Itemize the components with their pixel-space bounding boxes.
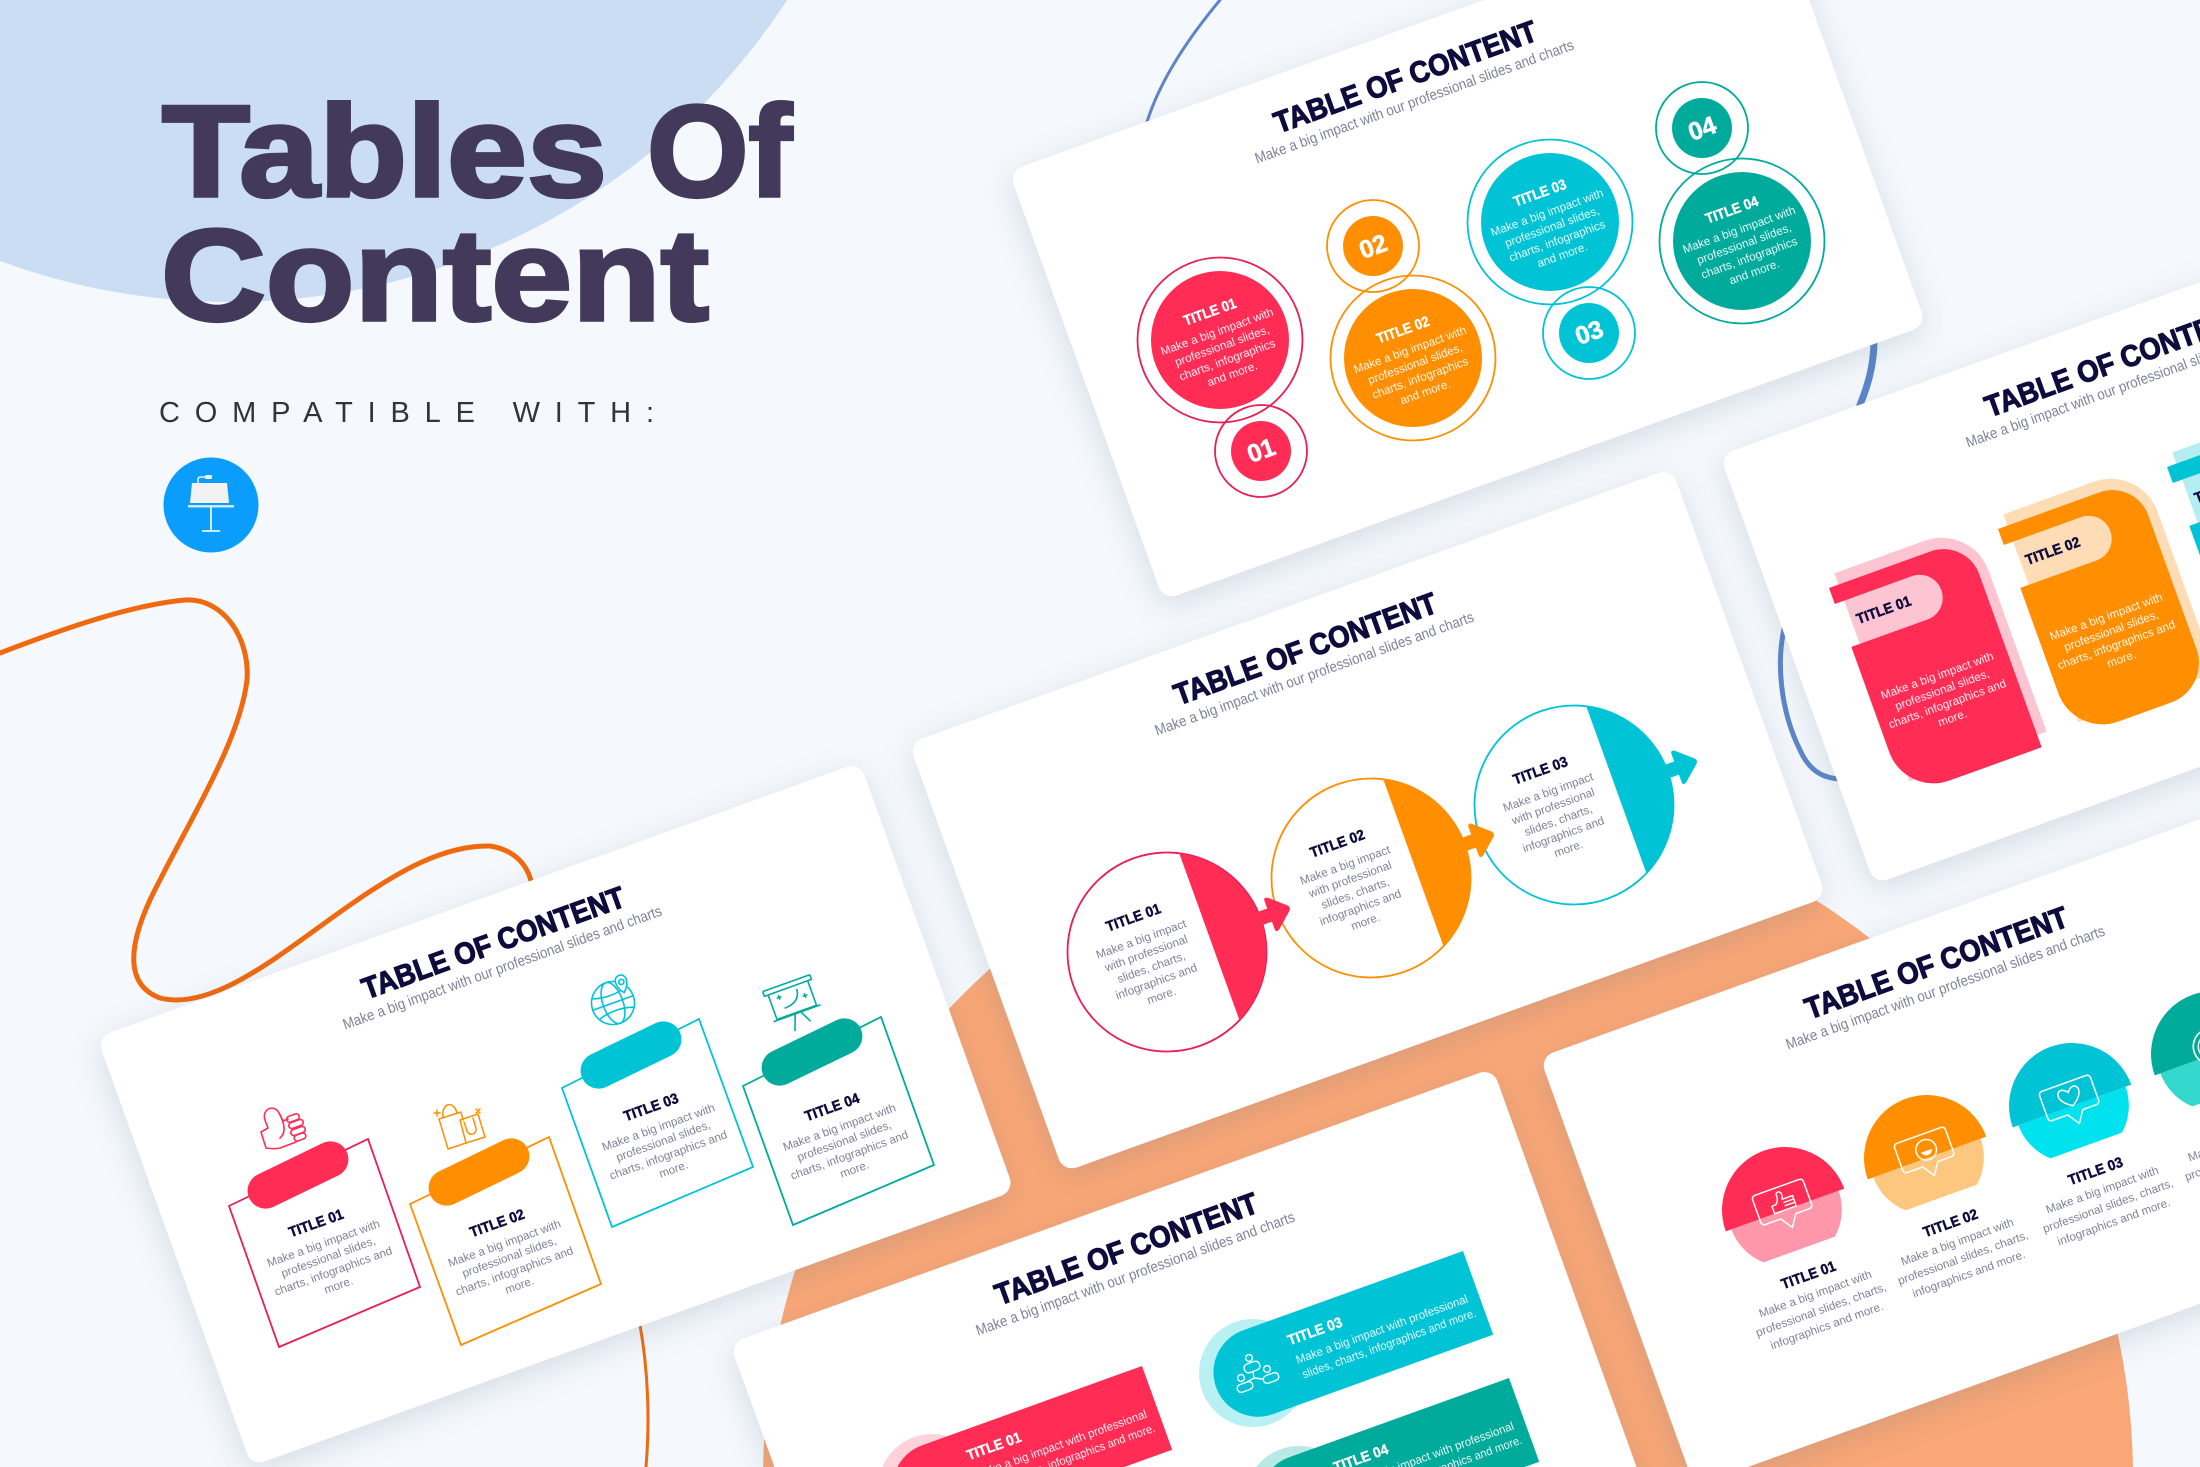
circle item 02: and more. xyxy=(1398,377,1452,407)
arrow circle 02: with professional xyxy=(1306,859,1393,901)
bar item 03: slides, charts, infographics and more. xyxy=(1300,1307,1478,1381)
note card 02 xyxy=(410,1132,601,1345)
slide card and heading A: Make a big impact with our professional slides and charts xyxy=(1253,37,1576,167)
icon item 03 xyxy=(1986,1023,2181,1252)
circle item 02: TITLE 02 xyxy=(1375,314,1432,348)
note card 04: Make a big impact with xyxy=(781,1101,898,1154)
icon item 02: professional slides, charts, xyxy=(1896,1229,2030,1288)
bar item 01 xyxy=(878,1366,1172,1467)
note card 02: TITLE 02 xyxy=(468,1207,527,1241)
circle item 02: 02 xyxy=(1356,229,1391,265)
folder card 01 xyxy=(1825,524,2051,797)
slide card and heading E xyxy=(1540,782,2200,1467)
circle item 01: 01 xyxy=(1244,433,1279,469)
folder card 02: more. xyxy=(2105,648,2138,671)
background light blue circle xyxy=(0,0,895,302)
icon item 01: TITLE 01 xyxy=(1779,1259,1838,1293)
circle item 03: professional slides, xyxy=(1503,204,1601,250)
circle item 02: charts, infographics xyxy=(1370,355,1470,402)
note card 04 xyxy=(743,1012,934,1225)
folder card 02: charts, infographics and xyxy=(2056,618,2177,672)
heading: Tables Of Content: Content xyxy=(161,202,709,348)
slide card and heading C: Make a big impact with our professional slides and charts xyxy=(341,903,664,1033)
note card 01: more. xyxy=(322,1274,355,1297)
note card 04: more. xyxy=(838,1158,871,1181)
slide card and heading F: TABLE OF CONTENT xyxy=(991,1187,1262,1312)
folder card 02: TITLE 02 xyxy=(2023,535,2082,569)
note card 01 xyxy=(229,1135,420,1347)
arrow circle 03: TITLE 03 xyxy=(1511,754,1570,789)
panel: slide with pill bars xyxy=(730,1068,1647,1467)
icon: people network xyxy=(1236,1355,1280,1393)
note card 03: Make a big impact with xyxy=(600,1101,717,1154)
panel: slide with outlined note cards xyxy=(97,762,1014,1466)
icon item 02: Make a big impact with xyxy=(1899,1216,2015,1268)
arrow circle 01: more. xyxy=(1145,985,1178,1007)
heading: Tables Of Content: Of xyxy=(647,78,793,224)
bar item 03 xyxy=(1199,1251,1493,1429)
note card 03 xyxy=(562,1015,753,1227)
folder card 02 xyxy=(1994,465,2200,738)
circle item 03 xyxy=(1468,140,1635,379)
panel: slide with half-circle icons xyxy=(1540,782,2200,1467)
icon item 03: Make a big impact with xyxy=(2044,1164,2160,1216)
folder card 01: more. xyxy=(1936,707,1969,730)
panel: slide with arrow circles xyxy=(909,468,1826,1172)
slide card and heading F: Make a big impact with our professional slides and charts xyxy=(974,1209,1297,1339)
panel: slide with folder cards xyxy=(1720,180,2200,884)
arrow circle 01: slides, charts, xyxy=(1116,949,1187,986)
heading: Tables Of Content xyxy=(161,78,793,348)
note card 04: charts, infographics and xyxy=(789,1128,910,1183)
note card 02: more. xyxy=(503,1274,536,1297)
note card 01: charts, infographics and xyxy=(273,1244,394,1299)
icon item 03: TITLE 03 xyxy=(2066,1155,2125,1189)
circle item 04 xyxy=(1656,82,1824,324)
circle item 01: TITLE 01 xyxy=(1182,296,1239,330)
arrow circle 01: with professional xyxy=(1102,933,1189,975)
folder card 01: charts, infographics and xyxy=(1887,677,2008,731)
bar item 04 xyxy=(1245,1378,1539,1467)
slide card and heading B xyxy=(909,468,1826,1172)
folder card 01: Make a big impact with xyxy=(1879,650,1995,702)
circle item 03: and more. xyxy=(1535,240,1589,270)
icon item 01 xyxy=(1699,1127,1894,1356)
arrow circle 03: more. xyxy=(1552,838,1585,860)
circle item 02: Make a big impact with xyxy=(1352,324,1468,376)
circle item 04: 04 xyxy=(1685,111,1720,147)
icon: presentation board xyxy=(763,975,826,1037)
slide card and heading A xyxy=(1009,0,1926,600)
arrow circle 03 xyxy=(1447,667,1731,932)
icon item 04 xyxy=(2128,971,2200,1184)
background peach circle xyxy=(763,793,2133,1467)
bar item 03: Make a big impact with professional xyxy=(1294,1293,1470,1367)
icon: globe with pin xyxy=(585,973,641,1031)
circle item 04: and more. xyxy=(1727,257,1781,287)
label: compatible with: COMPATIBLE WITH: xyxy=(159,397,654,429)
arrow circle 03: Make a big impact xyxy=(1501,770,1596,815)
icon item 02: infographics and more. xyxy=(1911,1248,2027,1300)
circle item 03: 03 xyxy=(1572,315,1607,351)
slide card and heading C xyxy=(97,762,1014,1466)
slide card and heading A: TABLE OF CONTENT xyxy=(1270,15,1541,140)
bar item 01: TITLE 01 xyxy=(965,1430,1024,1464)
icon item 03: professional slides, charts, xyxy=(2041,1177,2175,1236)
note card 03: professional slides, xyxy=(614,1118,712,1164)
arrow circle 02 xyxy=(1244,740,1528,1005)
note card 03: charts, infographics and xyxy=(608,1128,729,1183)
folder card 01: professional slides, xyxy=(1893,667,1991,713)
arrow circle 02: slides, charts, xyxy=(1320,875,1391,912)
icon item 03: infographics and more. xyxy=(2056,1196,2172,1248)
icon: shopping bags xyxy=(434,1105,485,1149)
icon: thumbs up xyxy=(261,1108,307,1149)
note card 02: Make a big impact with xyxy=(446,1217,563,1270)
icon: keynote xyxy=(164,458,258,552)
folder card 02: professional slides, xyxy=(2062,608,2160,654)
arrow circle 01: Make a big impact xyxy=(1094,917,1189,962)
arrow circle 03: slides, charts, xyxy=(1523,802,1594,839)
folder card 01: TITLE 01 xyxy=(1854,594,1913,628)
circle item 04: professional slides, xyxy=(1695,221,1793,267)
slide card and heading C: TABLE OF CONTENT xyxy=(358,881,629,1006)
circle item 04: charts, infographics xyxy=(1699,235,1799,282)
folder card 03 xyxy=(2163,403,2200,676)
arrow circle 01: infographics and xyxy=(1114,961,1199,1002)
note card 02: professional slides, xyxy=(460,1234,558,1280)
circle item 03: Make a big impact with xyxy=(1489,187,1605,239)
note card 01: TITLE 01 xyxy=(287,1207,346,1241)
circle item 01: charts, infographics xyxy=(1177,337,1277,384)
circle item 01: professional slides, xyxy=(1173,323,1271,369)
bar item 03: TITLE 03 xyxy=(1286,1315,1345,1349)
circle item 01: Make a big impact with xyxy=(1159,306,1275,358)
note card 01: Make a big impact with xyxy=(265,1217,382,1270)
note card 02: charts, infographics and xyxy=(454,1244,575,1299)
slide card and heading E: TABLE OF CONTENT xyxy=(1801,901,2072,1026)
arrow circle 02: infographics and xyxy=(1318,887,1403,928)
circle item 03: TITLE 03 xyxy=(1512,177,1569,211)
circle item 04: Make a big impact with xyxy=(1681,204,1797,256)
icon item 01: professional slides, charts, xyxy=(1754,1281,1888,1340)
arrow circle 03: infographics and xyxy=(1521,814,1606,855)
blue scribble line xyxy=(1147,0,1874,779)
slide card and heading B: Make a big impact with our professional slides and charts xyxy=(1153,609,1476,739)
arrow circle 02: more. xyxy=(1349,911,1382,933)
slide card and heading D xyxy=(1720,180,2200,884)
circle item 04: TITLE 04 xyxy=(1704,194,1761,228)
folder card 02: Make a big impact with xyxy=(2048,591,2164,643)
arrow circle 02: TITLE 02 xyxy=(1308,827,1367,862)
note card 03: TITLE 03 xyxy=(622,1091,681,1125)
slide card and heading F xyxy=(730,1068,1647,1467)
arrow circle 03: with professional xyxy=(1509,786,1596,828)
note card 03: more. xyxy=(657,1158,690,1181)
note card 04: professional slides, xyxy=(795,1118,893,1164)
circle item 03: charts, infographics xyxy=(1507,218,1607,265)
icon item 02: TITLE 02 xyxy=(1921,1207,1980,1241)
arrow circle 01 xyxy=(1040,814,1324,1079)
icon item 01: infographics and more. xyxy=(1769,1300,1885,1352)
orange scribble line xyxy=(0,600,648,1467)
panel: slide with numbered circles xyxy=(1009,0,1926,600)
heading: Tables Of Content: Tables xyxy=(162,78,607,224)
slide card and heading B: TABLE OF CONTENT xyxy=(1170,587,1441,712)
circle item 02 xyxy=(1327,200,1496,440)
circle item 01 xyxy=(1138,258,1307,497)
slide card and heading E: Make a big impact with our professional slides and charts xyxy=(1784,923,2107,1053)
note card 01: professional slides, xyxy=(279,1234,377,1280)
note card 04: TITLE 04 xyxy=(803,1091,862,1125)
arrow circle 01: TITLE 01 xyxy=(1104,901,1163,936)
arrow circle 02: Make a big impact xyxy=(1298,843,1393,888)
circle item 02: professional slides, xyxy=(1366,341,1464,387)
circle item 01: and more. xyxy=(1205,359,1259,389)
icon item 02 xyxy=(1841,1075,2036,1304)
icon item 01: Make a big impact with xyxy=(1757,1268,1873,1320)
